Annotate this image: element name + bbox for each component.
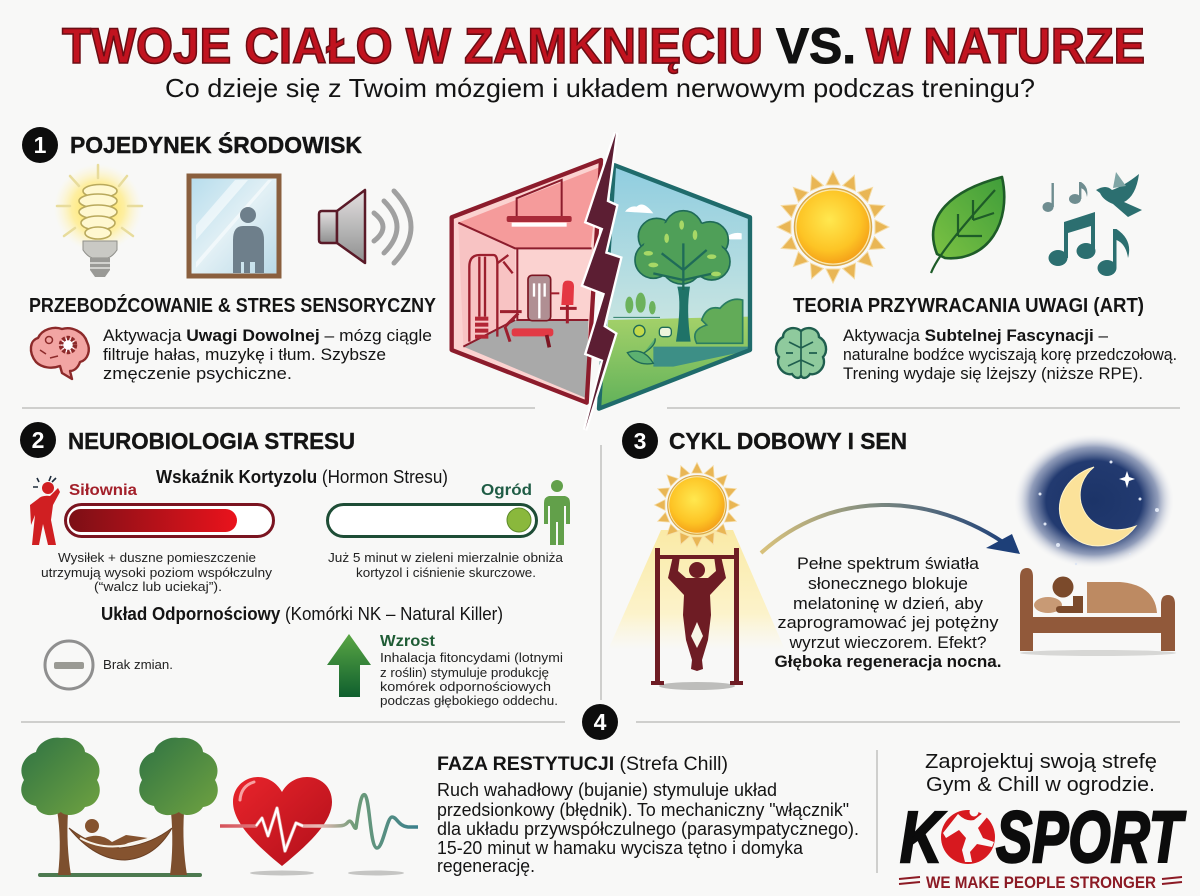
text: no change: Brak zmian. [103,657,173,672]
arrow: day to night [761,505,1020,554]
text: restitution phase: Ruch wahadłowy (bujanie) stymuluje układ [437,780,777,800]
text: garden cortisol: Już 5 minut w zieleni mierzalnie obniża [328,550,564,565]
label: garden: Ogród [481,482,532,499]
icon: no change [45,641,93,689]
icon: person on pull-up bar [651,548,743,690]
text: growth: komórek odpornościowych [380,679,551,694]
section 1 heading: POJEDYNEK ŚRODOWISK [70,131,362,158]
text: voluntary attention: Aktywacja Uwagi Dowolnej – mózg ciągle [103,326,432,345]
call to action: Gym & Chill w ogrodzie. [926,774,1155,796]
text: growth: z roślin) stymuluje produkcję [380,665,549,680]
icon: speaker [319,190,411,263]
section 2 heading [20,422,355,458]
icon: mirror with person [189,176,279,276]
section 1 heading [22,127,362,163]
call to action: Zaprojektuj swoją strefę [925,751,1157,773]
text: sunlight: zaprogramować jej potężny [778,613,999,632]
text: restitution phase [437,754,859,876]
logo: KoSport [899,798,1187,892]
section 3 heading [622,423,907,459]
text: growth: Inhalacja fitoncydami (lotnymi [380,650,563,665]
text: voluntary attention [103,326,432,383]
text: garden cortisol [328,550,564,580]
title [62,18,1145,74]
text: subtle fascination: Trening wydaje się lżejszy (niższe RPE). [843,364,1143,383]
section 2 heading: 2 [32,427,44,453]
subheading: attention restoration: TEORIA PRZYWRACANIA UWAGI (ART) [793,295,1144,317]
icon: hammock between trees [21,738,218,877]
icon: sun (nature) [777,171,889,283]
text: growth: Wzrost [380,633,436,650]
icon: sun with light beam [608,462,785,650]
icon: light bulb [54,164,142,277]
text: sunlight: melatoninę w dzień, aby [793,594,984,613]
text: voluntary attention: zmęczenie psychiczne. [103,364,292,383]
text: sunlight: wyrzut wieczorem. Efekt? [788,633,986,652]
text: subtle fascination [843,326,1177,383]
icon: stressed brain [31,328,89,379]
icon: stressed person [30,476,60,545]
section 3 heading: 3 [634,428,646,454]
text: sunlight: słonecznego blokuje [808,574,968,593]
call to action [925,751,1157,796]
subheading: sensory stress: PRZEBODŹCOWANIE & STRES SENSORYCZNY [29,294,437,317]
text: garden cortisol: kortyzol i ciśnienie skurczowe. [356,565,536,580]
nature half [598,165,750,409]
section 1 heading: 1 [34,132,47,158]
text: sunlight: Głęboka regeneracja nocna. [774,652,1002,671]
cortisol bar: garden [328,504,536,536]
text: restitution phase: przedsionkowy (błędnik). To mechaniczny "włącznik" [437,800,849,820]
text: growth [380,633,563,708]
text: voluntary attention: filtruje hałas, muzykę i tłum. Szybsze [103,345,386,364]
title: VS. [776,18,856,74]
logo: KoSport: K [900,798,946,878]
heading: immune system: Układ Odpornościowy (Komórki NK – Natural Killer) [101,604,503,624]
icon: bed with sleeper [1020,568,1176,656]
text: restitution phase: FAZA RESTYTUCJI (Strefa Chill) [437,754,728,775]
icon: calm person [544,480,570,545]
dividers [21,408,1180,873]
text: subtle fascination: Aktywacja Subtelnej Fascynacji – [843,326,1109,345]
cortisol bar: gym [66,504,274,536]
section 2 heading: NEUROBIOLOGIA STRESU [68,428,355,454]
text: restitution phase: dla układu przywspółczulnego (parasympatycznego). [437,819,859,839]
text: gym cortisol: utrzymują wysoki poziom współczulny [41,565,273,580]
text: gym cortisol: Wysiłek + duszne pomieszczenie [58,550,256,565]
text: gym cortisol: (“walcz lub uciekaj”). [94,579,222,594]
icon: music and bird [1042,172,1142,276]
section 3 heading: CYKL DOBOWY I SEN [669,428,907,454]
lightning bolt [583,133,620,430]
heading: cortisol: Wskaźnik Kortyzolu (Hormon Stresu) [156,467,448,487]
subtitle: Co dzieje się z Twoim mózgiem i układem nerwowym podczas treningu? [165,73,1035,103]
text: gym cortisol [41,550,273,594]
icon: growth arrow [327,634,371,697]
text: restitution phase: regenerację. [437,856,535,876]
icon: heart with ECG [220,777,418,876]
icon: calm brain [776,328,826,378]
text: subtle fascination: naturalne bodźce wyciszają korę przedczołową. [843,345,1177,364]
central illustration: gym vs nature [452,133,750,430]
text: restitution phase: 15-20 minut w hamaku wycisza tętno i domyka [437,838,804,858]
text: growth: podczas głębokiego oddechu. [380,693,558,708]
gym half [452,160,602,403]
icon: leaf [931,177,1004,273]
logo: KoSport: WE MAKE PEOPLE STRONGER [926,873,1156,892]
title: TWOJE CIAŁO W ZAMKNIĘCIU [62,18,763,74]
label: gym: Siłownia [69,482,137,499]
text: sunlight [774,554,1002,671]
section 4 badge [582,704,618,740]
icon: moon and stars [1014,434,1174,568]
text: sunlight: Pełne spektrum światła [797,554,980,573]
title: W NATURZE [866,18,1145,74]
section 4 badge: 4 [594,709,607,735]
